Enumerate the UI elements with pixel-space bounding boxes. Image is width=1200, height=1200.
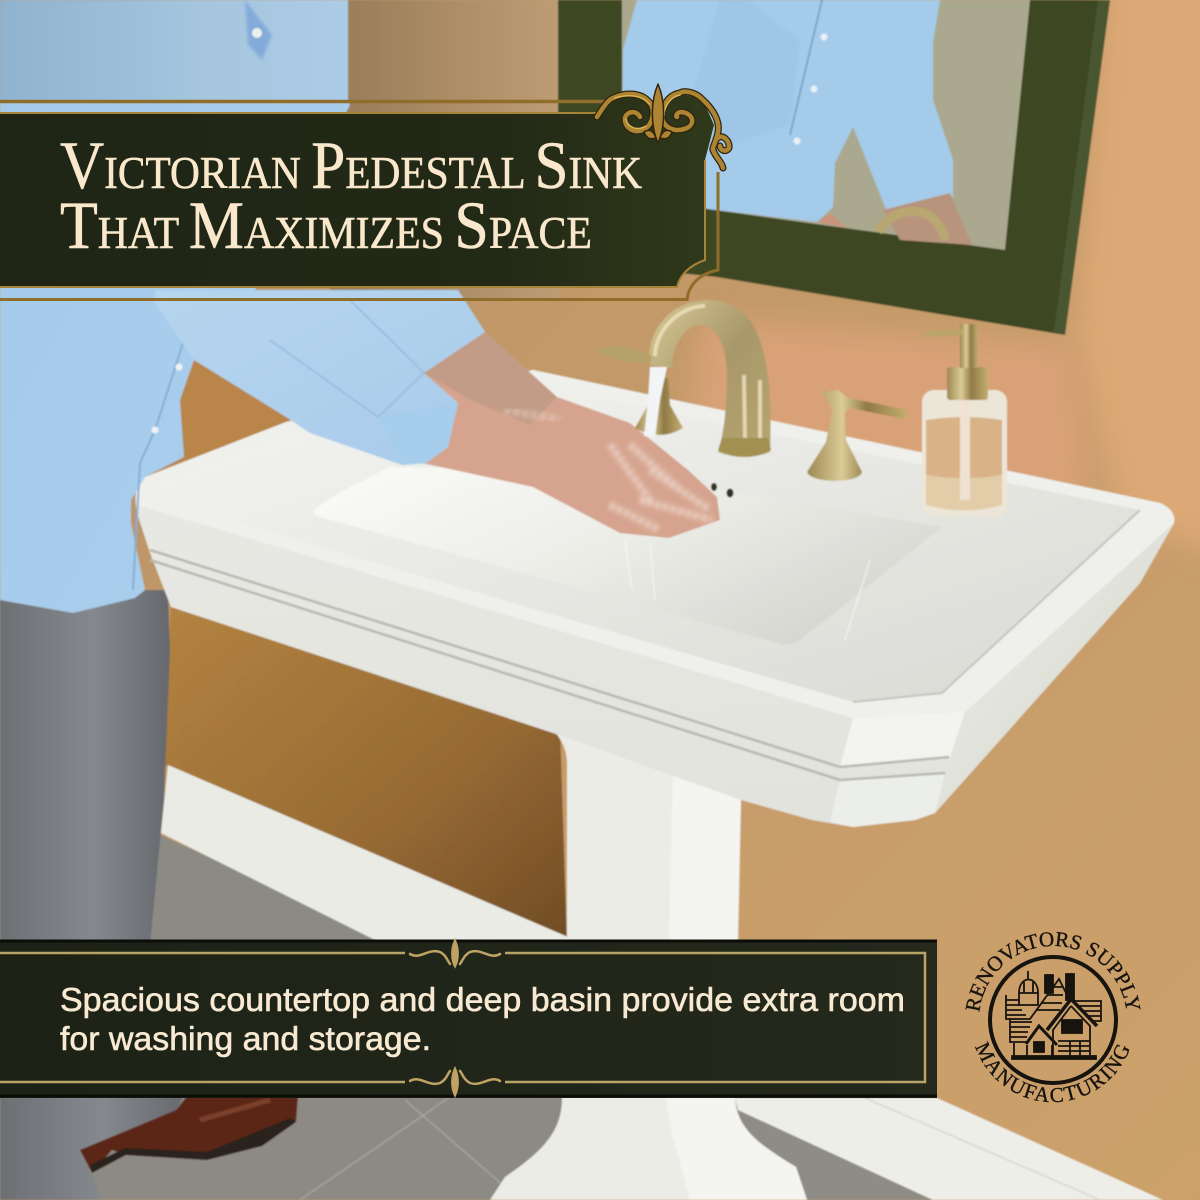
person: trousers: [0, 590, 187, 1200]
stone base: [1014, 1041, 1090, 1058]
lower siding: [1010, 1019, 1032, 1042]
countertop inset line: [853, 510, 1140, 702]
chimneys: [1045, 974, 1074, 1000]
big gable: [1047, 999, 1097, 1030]
caption gold frame: [0, 953, 925, 1082]
gable walls: [1053, 1006, 1090, 1058]
main roof: [1006, 979, 1101, 1021]
logo house: [1006, 971, 1101, 1059]
baseboard right: [735, 1098, 1163, 1200]
banner panel: [0, 94, 714, 287]
banner gold frame: [0, 102, 718, 300]
logo text: [965, 932, 1141, 1102]
title banner: [0, 84, 729, 300]
countertop: [160, 385, 1140, 702]
caption top ornament: [410, 941, 500, 966]
banner inner rule: [0, 113, 705, 287]
logo: Renovators Supply Manufacturing: [965, 932, 1141, 1102]
spout highlight: [655, 306, 760, 440]
drain holes: [711, 483, 734, 498]
floor tiles: [0, 830, 940, 1200]
soap dispenser: [917, 324, 1007, 517]
caption bottom ornament: [410, 1069, 500, 1095]
person: sleeve: [155, 290, 485, 465]
reflected shirt: [622, 0, 953, 222]
left handle: [597, 347, 652, 363]
water stream: [644, 367, 667, 438]
reflected shirt folds and buttons: [690, 0, 828, 155]
pedestal column: [490, 730, 807, 1200]
countertop lip: [136, 370, 1174, 718]
house ground line: [1012, 1056, 1096, 1059]
person: shoe: [80, 1096, 298, 1173]
caption edge bands: [0, 941, 937, 1096]
dome: [1019, 971, 1038, 1005]
shirt placket and buttons: [133, 0, 272, 590]
person: torso shirt: [0, 0, 350, 613]
baseboard left: [161, 765, 568, 945]
logo text: MANUFACTURING: [974, 1040, 1130, 1102]
caption banner: [0, 940, 937, 1098]
right handle: [807, 390, 907, 481]
faucet: [597, 300, 907, 481]
moulding lines: [150, 550, 949, 780]
pedestal sink: [136, 370, 1174, 827]
corner ornament: [597, 84, 729, 168]
porch door: [1034, 1042, 1044, 1052]
roof shingles: [1006, 987, 1100, 1016]
water droplets: [625, 540, 870, 640]
gable window: [1062, 1020, 1082, 1033]
right side face: [935, 523, 1174, 813]
left base: [635, 378, 683, 435]
caption text: [60, 981, 905, 1057]
spout base: [718, 438, 771, 457]
caption text: for washing and storage.: [60, 1020, 431, 1057]
basin: [314, 467, 942, 645]
sink silhouette: [136, 370, 1174, 827]
caption panel: [0, 940, 937, 1098]
caption text: Spacious countertop and deep basin provide extra room: [60, 981, 905, 1018]
logo text: RENOVATORS SUPPLY: [965, 932, 1141, 1012]
banner title text: VICTORIAN PEDESTAL SINK: [60, 127, 642, 203]
chamfered corner: [830, 712, 965, 827]
person: forearm and soapy hand: [422, 332, 720, 538]
logo ring: [990, 957, 1116, 1083]
mirror with green frame: [558, 0, 1110, 335]
reflected hands and faucet: [817, 193, 972, 245]
banner title text: [60, 127, 642, 263]
banner title text: THAT MAXIMIZES SPACE: [60, 187, 592, 263]
spout: [649, 300, 771, 457]
porch gable: [1026, 1026, 1057, 1045]
fleur: [644, 84, 672, 143]
